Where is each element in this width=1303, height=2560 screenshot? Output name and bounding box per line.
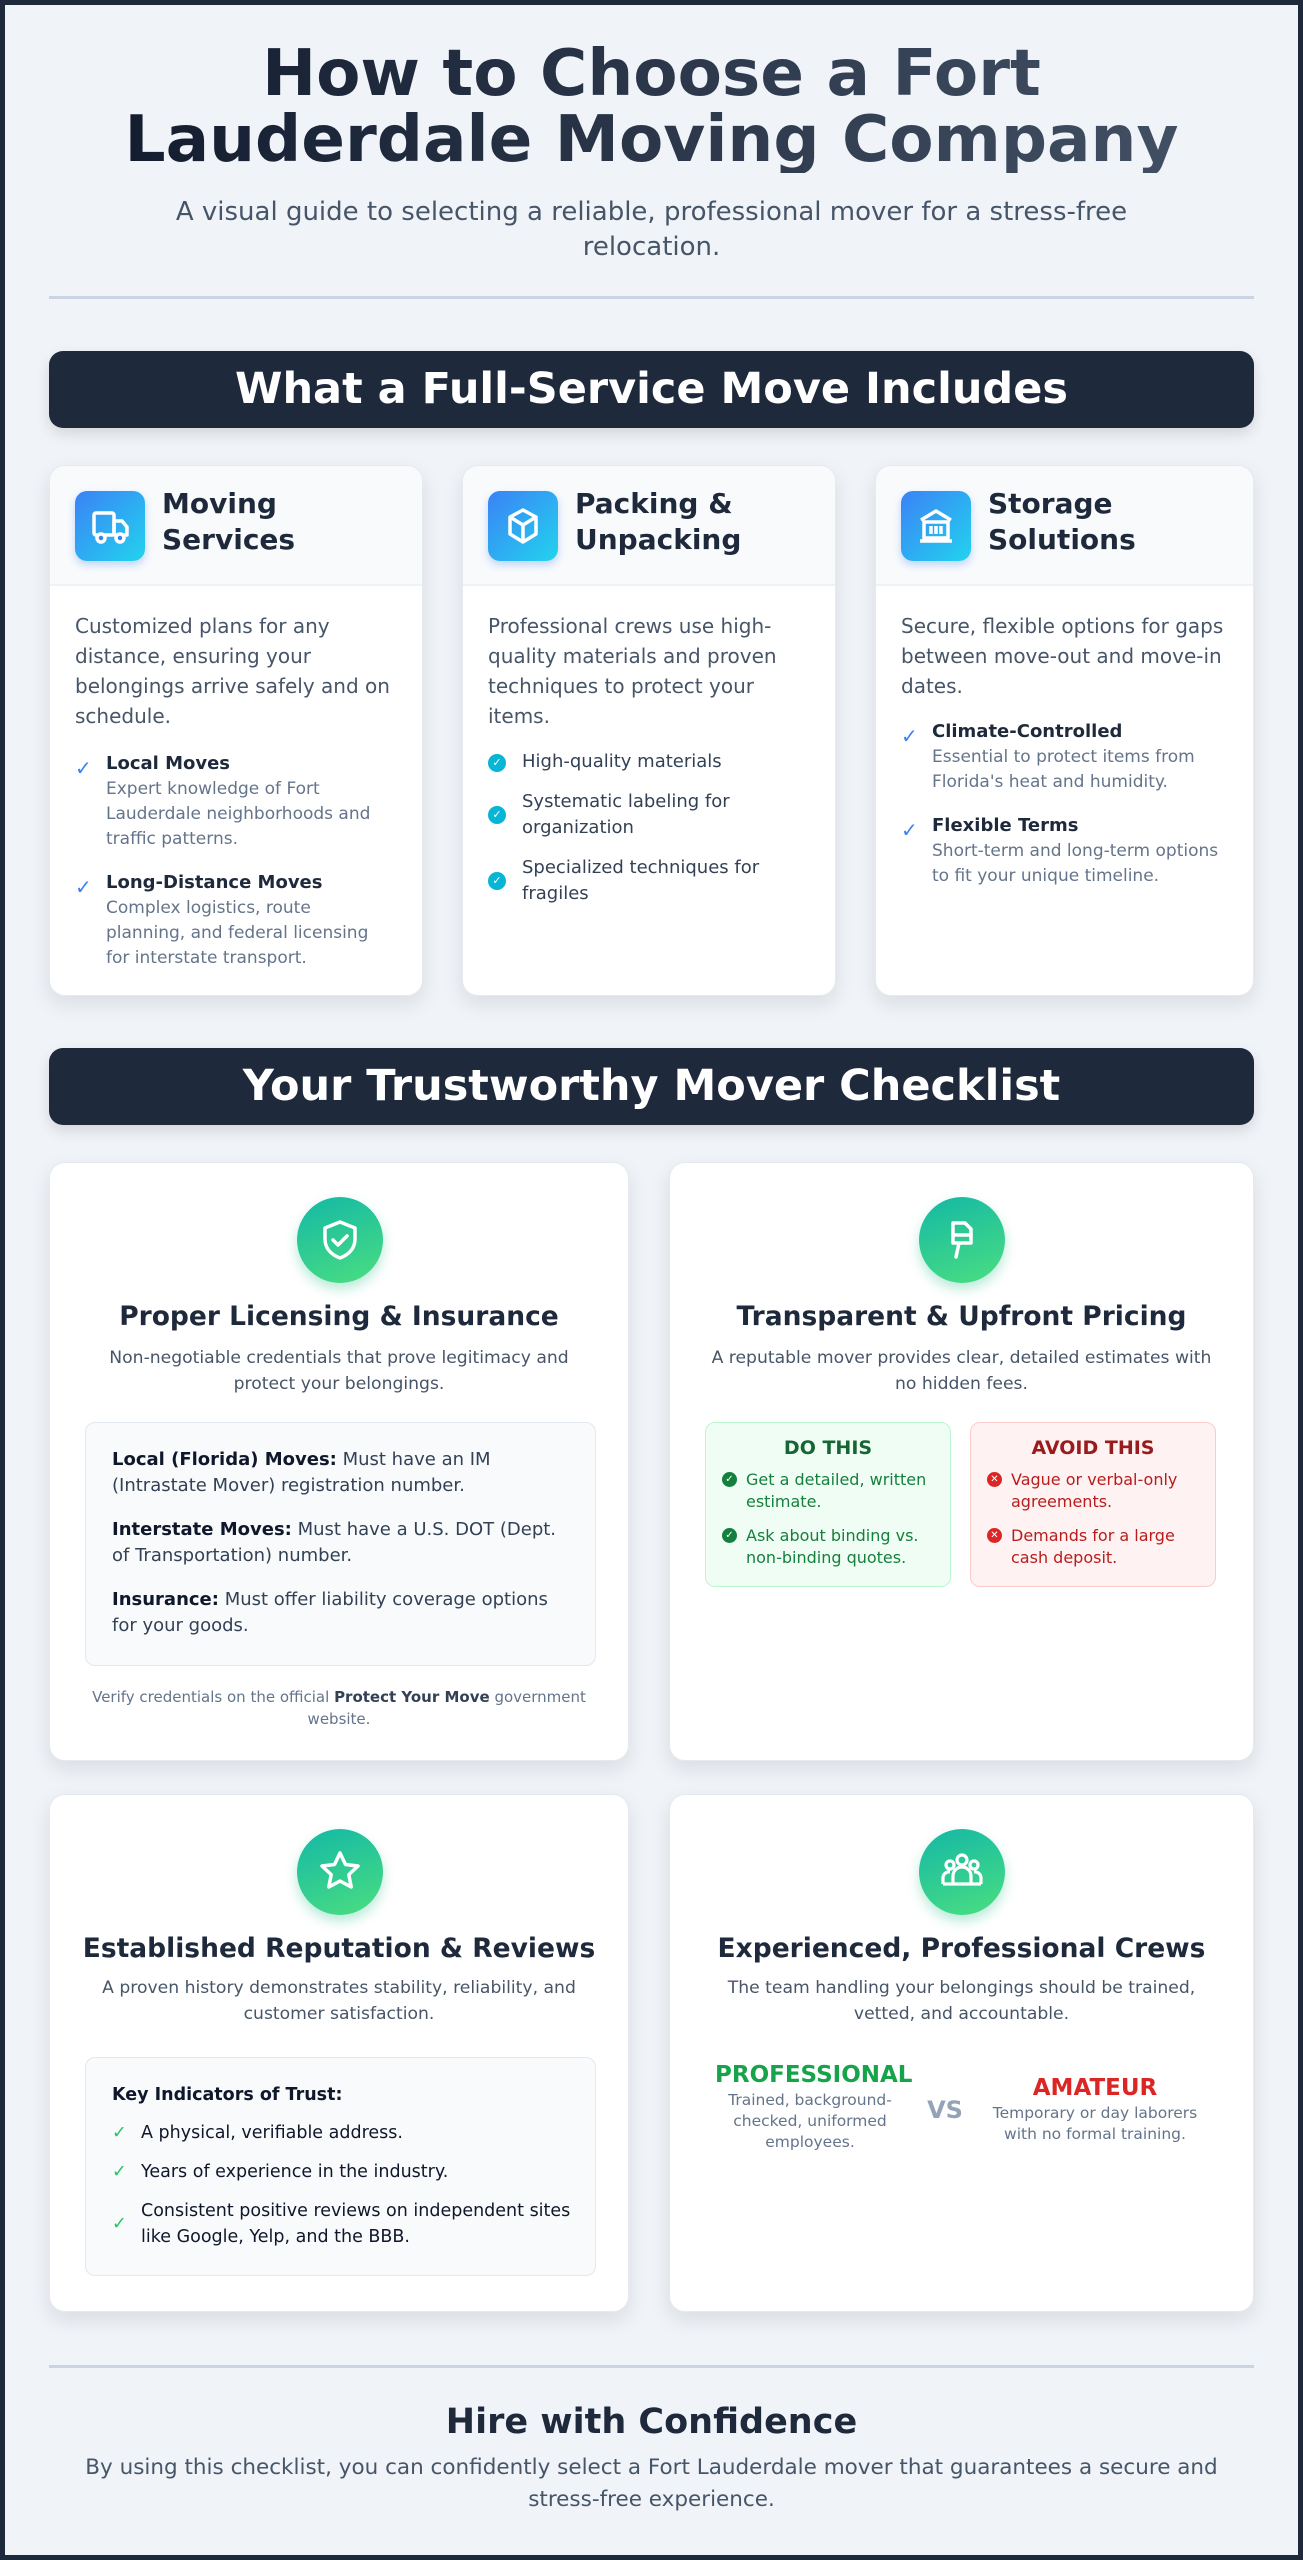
avoid this box: AVOID THIS (1031, 1437, 1154, 1459)
heading: Experienced, Professional Crews (718, 1933, 1205, 1964)
text block: Climate-Controlled (932, 721, 1122, 742)
heading: Established Reputation & Reviews (83, 1933, 595, 1964)
text block: Expert knowledge of Fort Lauderdale neighborhoods and traffic patterns. (106, 779, 370, 849)
icon: truck (75, 491, 145, 561)
trust indicators box: Consistent positive reviews on independent sites like Google, Yelp, and the BBB. (141, 2201, 570, 2247)
panel: crews (669, 1794, 1254, 2312)
icon: team (919, 1829, 1005, 1915)
trust indicators box: Key Indicators of Trust: (112, 2085, 342, 2105)
text block: Systematic labeling for organization (522, 791, 730, 838)
text block: ✓ (75, 875, 92, 899)
panel: packing (462, 465, 836, 996)
footer heading: Hire with Confidence (446, 2402, 857, 2442)
text block: Long-Distance Moves (106, 872, 322, 893)
trust indicators box: ✓ (112, 2162, 127, 2182)
panel: storage (875, 465, 1254, 996)
do this box: Get a detailed, written estimate. (746, 1470, 926, 1511)
avoid this box: ✕ (990, 1530, 999, 1541)
text block: High-quality materials (522, 751, 722, 772)
text block (488, 614, 777, 904)
footer text: By using this checklist, you can confidently select a Fort Lauderdale mover that guarantees a secure and stress-free experience. (85, 2455, 1218, 2512)
heading: Services (162, 523, 295, 556)
text block: ✓ (901, 818, 918, 842)
heading: Storage (988, 487, 1113, 520)
heading (988, 487, 1136, 556)
credential box: Interstate Moves: Must have a U.S. DOT (Dept. of Transportation) number. (112, 1519, 556, 1566)
footnote: Verify credentials on the official Protect Your Move government website. (92, 1688, 586, 1728)
do this box (705, 1422, 951, 1587)
icon: warehouse (901, 491, 971, 561)
text block: ✓ (901, 724, 918, 748)
heading: Moving (162, 487, 277, 520)
avoid this box (970, 1422, 1216, 1587)
comparison: professional vs amateur: PROFESSIONAL (715, 2062, 912, 2088)
panel: pricing (669, 1162, 1254, 1761)
panel: moving services (49, 465, 423, 996)
text block: A proven history demonstrates stability, reliability, and customer satisfaction. (102, 1978, 576, 2024)
section heading: checklist (49, 1048, 1254, 1125)
text block: ✓ (492, 756, 502, 769)
heading: Proper Licensing & Insurance (119, 1301, 559, 1332)
heading (162, 487, 295, 556)
section heading: full-service (49, 351, 1254, 428)
text block: Essential to protect items from Florida's heat and humidity. (932, 747, 1195, 792)
trust indicators box: ✓ (112, 2123, 127, 2143)
comparison: professional vs amateur (715, 2062, 1197, 2151)
text block: Customized plans for any distance, ensuring your belongings arrive safely and on schedule. (75, 614, 390, 728)
text block: Local Moves (106, 753, 230, 774)
avoid this box: ✕ (990, 1474, 999, 1485)
text block: Non-negotiable credentials that prove legitimacy and protect your belongings. (109, 1348, 569, 1394)
icon: star (297, 1829, 383, 1915)
comparison: professional vs amateur: Trained, background-checked, uniformed employees. (728, 2091, 892, 2151)
comparison: professional vs amateur: VS (927, 2096, 963, 2124)
credential box: Local (Florida) Moves: Must have an IM (Intrastate Mover) registration number. (112, 1449, 491, 1496)
text block: Professional crews use high-quality materials and proven techniques to protect your items. (488, 614, 777, 728)
text block: planning, and federal licensing for interstate transport. (106, 923, 368, 968)
icon: box (488, 491, 558, 561)
heading: Packing & (575, 487, 733, 520)
title: Lauderdale Moving Company (124, 102, 1178, 177)
subtitle: A visual guide to selecting a reliable, professional mover for a stress-free relocation. (176, 197, 1127, 262)
title (5, 41, 1298, 173)
text block: Complex logistics, route (106, 898, 311, 918)
title: How to Choose a Fort (262, 36, 1041, 111)
avoid this box: Vague or verbal-only agreements. (1011, 1470, 1177, 1511)
do this box: Ask about binding vs. non-binding quotes. (746, 1526, 918, 1567)
text block (75, 614, 390, 968)
section heading: checklist: Your Trustworthy Mover Checklist (243, 1061, 1060, 1111)
trust indicators box: Years of experience in the industry. (141, 2162, 448, 2182)
text block: ✓ (492, 874, 502, 887)
credential box (85, 1422, 596, 1666)
trust indicators box: A physical, verifiable address. (141, 2123, 403, 2143)
panel: licensing (49, 1162, 629, 1761)
text block: Flexible Terms (932, 815, 1078, 836)
text block: Short-term and long-term options to fit your unique timeline. (932, 841, 1218, 886)
icon: receipt (919, 1197, 1005, 1283)
text block: ✓ (492, 808, 502, 821)
credential box: Insurance: Must offer liability coverage options for your goods. (112, 1589, 548, 1636)
trust indicators box (85, 2057, 596, 2276)
heading: Solutions (988, 523, 1136, 556)
heading (575, 487, 741, 556)
do this box: ✓ (725, 1530, 734, 1541)
trust indicators box: ✓ (112, 2214, 127, 2234)
section heading: full-service: What a Full-Service Move Includes (235, 364, 1068, 414)
text block: ✓ (75, 756, 92, 780)
avoid this box: Demands for a large cash deposit. (1011, 1526, 1175, 1567)
do this box: DO THIS (784, 1437, 872, 1459)
text block: Secure, flexible options for gaps between move-out and move-in dates. (901, 614, 1223, 698)
text block: Specialized techniques for fragiles (522, 857, 759, 904)
comparison: professional vs amateur: Temporary or day laborers with no formal training. (993, 2104, 1197, 2143)
comparison: professional vs amateur: AMATEUR (1033, 2075, 1157, 2101)
heading: Unpacking (575, 523, 741, 556)
heading: Transparent & Upfront Pricing (736, 1301, 1186, 1332)
text block: The team handling your belongings should be trained, vetted, and accountable. (728, 1978, 1195, 2024)
panel: reputation (49, 1794, 629, 2312)
text block (901, 614, 1223, 886)
do this box: ✓ (725, 1474, 734, 1485)
text block: A reputable mover provides clear, detailed estimates with no hidden fees. (712, 1348, 1211, 1394)
icon: shield (297, 1197, 383, 1283)
